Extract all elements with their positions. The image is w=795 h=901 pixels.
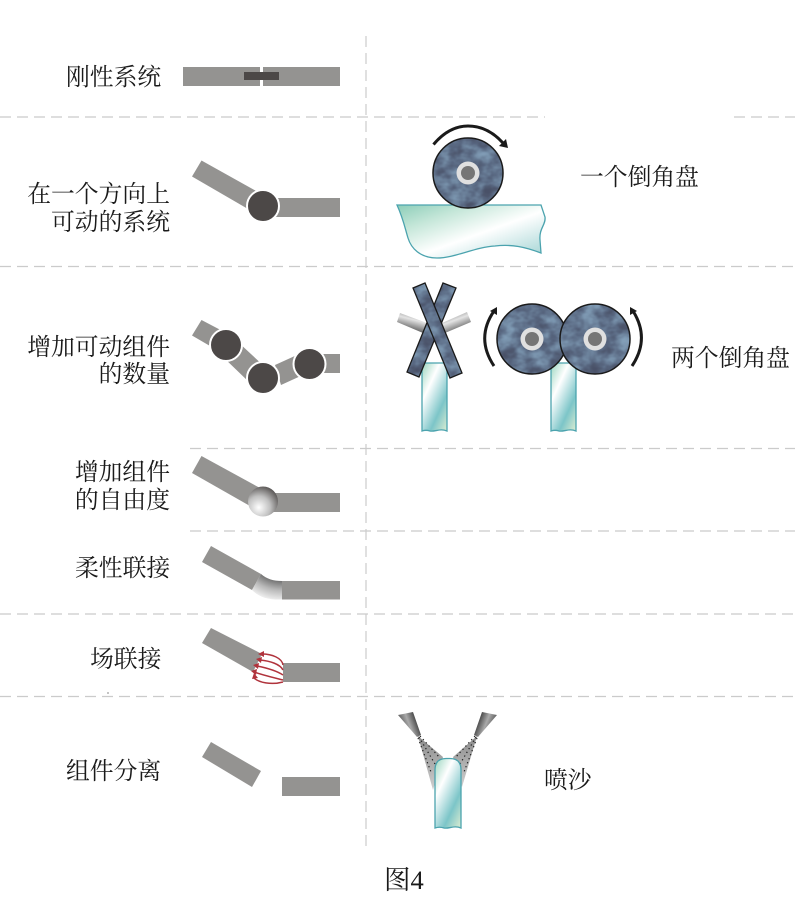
spray cones: [418, 736, 477, 790]
nozzle left: [398, 712, 421, 737]
diagram: three joints: [192, 320, 340, 394]
arrow left: [485, 307, 497, 366]
glass plate: [435, 758, 461, 828]
row 7 label: separated components: 组件分离: [66, 758, 161, 785]
glass plate left: [422, 363, 447, 431]
diagram: separated components: [202, 742, 340, 796]
rotation arrow: [434, 126, 508, 148]
crossed wheels: [405, 281, 464, 379]
right wheel: [560, 304, 630, 374]
row 3 label: more movable components: 增加可动组件: [27, 334, 170, 361]
figure caption: 图4: [384, 865, 424, 895]
panel: one chamfer wheel: [397, 126, 545, 258]
row 6 label: field joint: 场联接: [90, 646, 162, 673]
label: two chamfer wheels: 两个倒角盘: [671, 345, 790, 372]
diagram: flexible joint: [202, 546, 340, 600]
label: sandblasting: 喷沙: [544, 767, 593, 794]
row 2 label: movable in one direction: 在一个方向上: [27, 181, 170, 208]
arrow right: [630, 307, 642, 366]
field lines: [251, 651, 283, 683]
nozzle right: [474, 712, 497, 737]
row 1 label: rigid system: 刚性系统: [66, 64, 161, 91]
label: one chamfer wheel: 一个倒角盘: [580, 164, 699, 191]
rods: [397, 312, 471, 333]
left wheel: [497, 304, 567, 374]
row 5 label: flexible joint: 柔性联接: [75, 555, 170, 582]
diagram: ball joint: [192, 456, 340, 516]
spray particles: [418, 736, 477, 772]
row 4 label: component degrees of freedom: 的自由度: [75, 487, 170, 514]
chamfer wheel: [433, 138, 503, 208]
diagram: single hinge: [192, 160, 340, 222]
row 4 label: component degrees of freedom: 增加组件: [75, 459, 170, 486]
row 3 label: more movable components: 的数量: [99, 361, 170, 388]
glass plate right: [551, 363, 576, 431]
panel: two chamfer wheels: [397, 281, 642, 431]
row 2 label: movable in one direction: 可动的系统: [51, 209, 170, 236]
diagram: field joint: [202, 628, 340, 683]
panel: sandblasting: [398, 712, 497, 828]
diagram: rigid joint: [183, 67, 340, 86]
glass plate: [397, 205, 545, 258]
